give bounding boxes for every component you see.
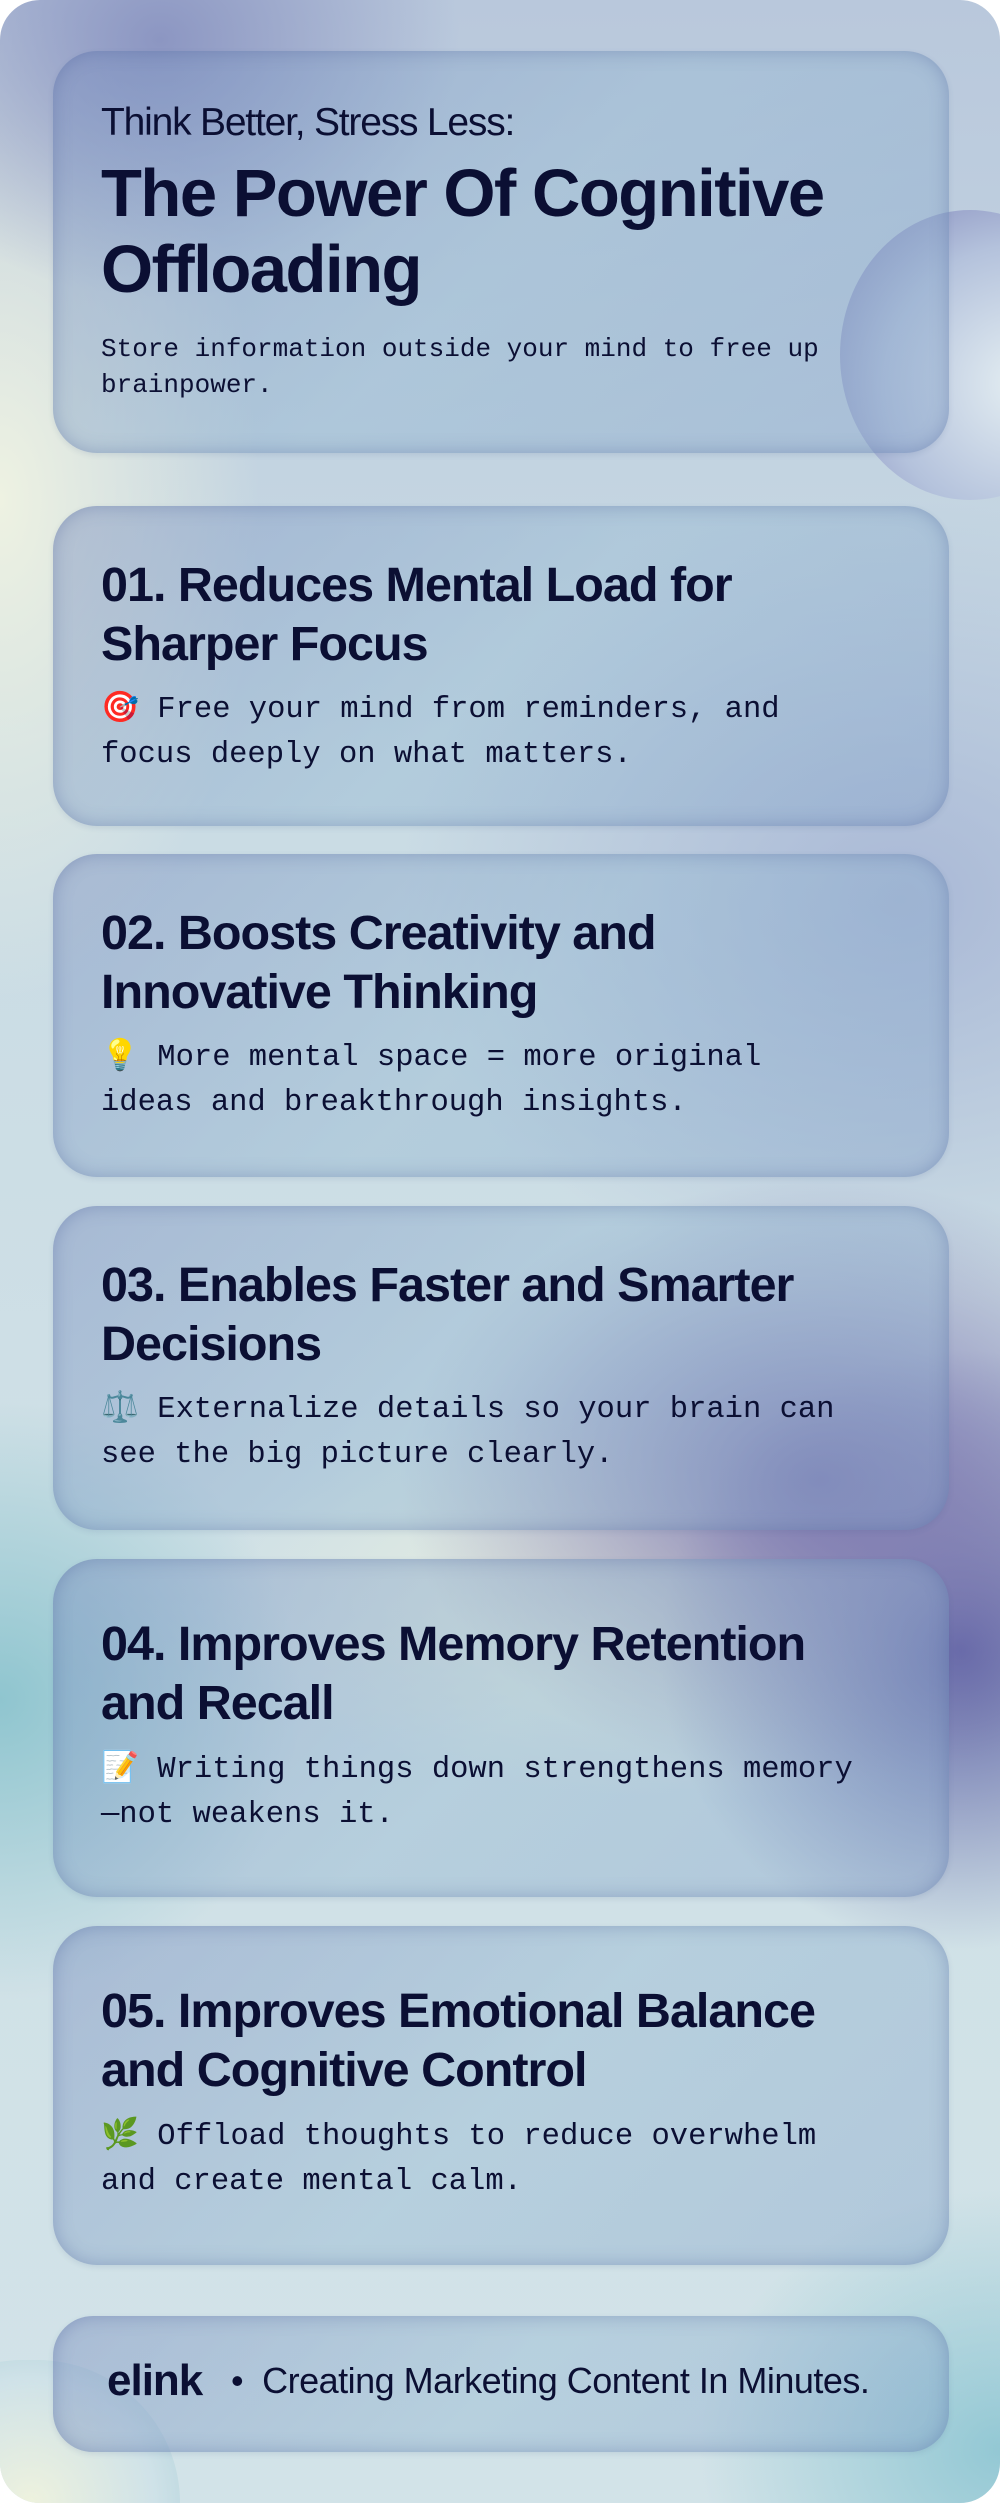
heading 03: Decisions	[101, 1317, 321, 1371]
heading 04: 04. Improves Memory Retention	[101, 1617, 805, 1671]
text 01: 🎯 Free your mind from reminders, and	[101, 693, 780, 727]
subtitle: Store information outside your mind to free up	[101, 334, 819, 364]
text 02: 💡 More mental space = more original	[101, 1041, 761, 1075]
title	[101, 156, 824, 307]
heading 05: and Cognitive Control	[101, 2043, 587, 2097]
subtitle	[101, 334, 819, 400]
heading 04: and Recall	[101, 1676, 334, 1730]
text 03: see the big picture clearly.	[101, 1438, 613, 1472]
text 04: 📝 Writing things down strengthens memory	[101, 1753, 853, 1787]
logo: elink	[107, 2356, 202, 2405]
heading 01: Sharper Focus	[101, 617, 428, 671]
text 05: 🌿 Offload thoughts to reduce overwhelm	[101, 2120, 816, 2154]
heading 01: 01. Reduces Mental Load for	[101, 558, 732, 612]
text 01: focus deeply on what matters.	[101, 738, 632, 772]
text 03	[101, 1390, 834, 1472]
text 04: —not weakens it.	[101, 1798, 394, 1832]
title: Offloading	[101, 232, 421, 307]
kicker: Think Better, Stress Less:	[101, 101, 514, 144]
heading 05: 05. Improves Emotional Balance	[101, 1984, 815, 2038]
heading 02: Innovative Thinking	[101, 965, 537, 1019]
heading 02	[101, 906, 656, 1019]
footer	[53, 2316, 949, 2452]
text 03: ⚖️ Externalize details so your brain can	[101, 1393, 834, 1427]
text 05: and create mental calm.	[101, 2165, 522, 2199]
text 04	[100, 1750, 853, 1832]
heading 02: 02. Boosts Creativity and	[101, 906, 656, 960]
header card	[53, 51, 949, 453]
heading 03: 03. Enables Faster and Smarter	[101, 1258, 793, 1312]
panel: 04	[53, 1559, 949, 1897]
panel: 02	[53, 854, 949, 1177]
text 02	[101, 1038, 761, 1120]
heading 05	[101, 1984, 815, 2097]
heading 04	[101, 1617, 805, 1730]
text 02: ideas and breakthrough insights.	[101, 1086, 687, 1120]
subtitle: brainpower.	[101, 370, 273, 400]
title: The Power Of Cognitive	[101, 156, 824, 231]
panel: 01	[53, 506, 949, 826]
text 01	[101, 690, 780, 772]
panel: 03	[53, 1206, 949, 1530]
heading 01	[101, 558, 732, 671]
tagline: • Creating Marketing Content In Minutes.	[231, 2360, 869, 2401]
text 05	[101, 2116, 816, 2199]
heading 03	[101, 1258, 794, 1371]
panel: 05	[53, 1926, 949, 2265]
